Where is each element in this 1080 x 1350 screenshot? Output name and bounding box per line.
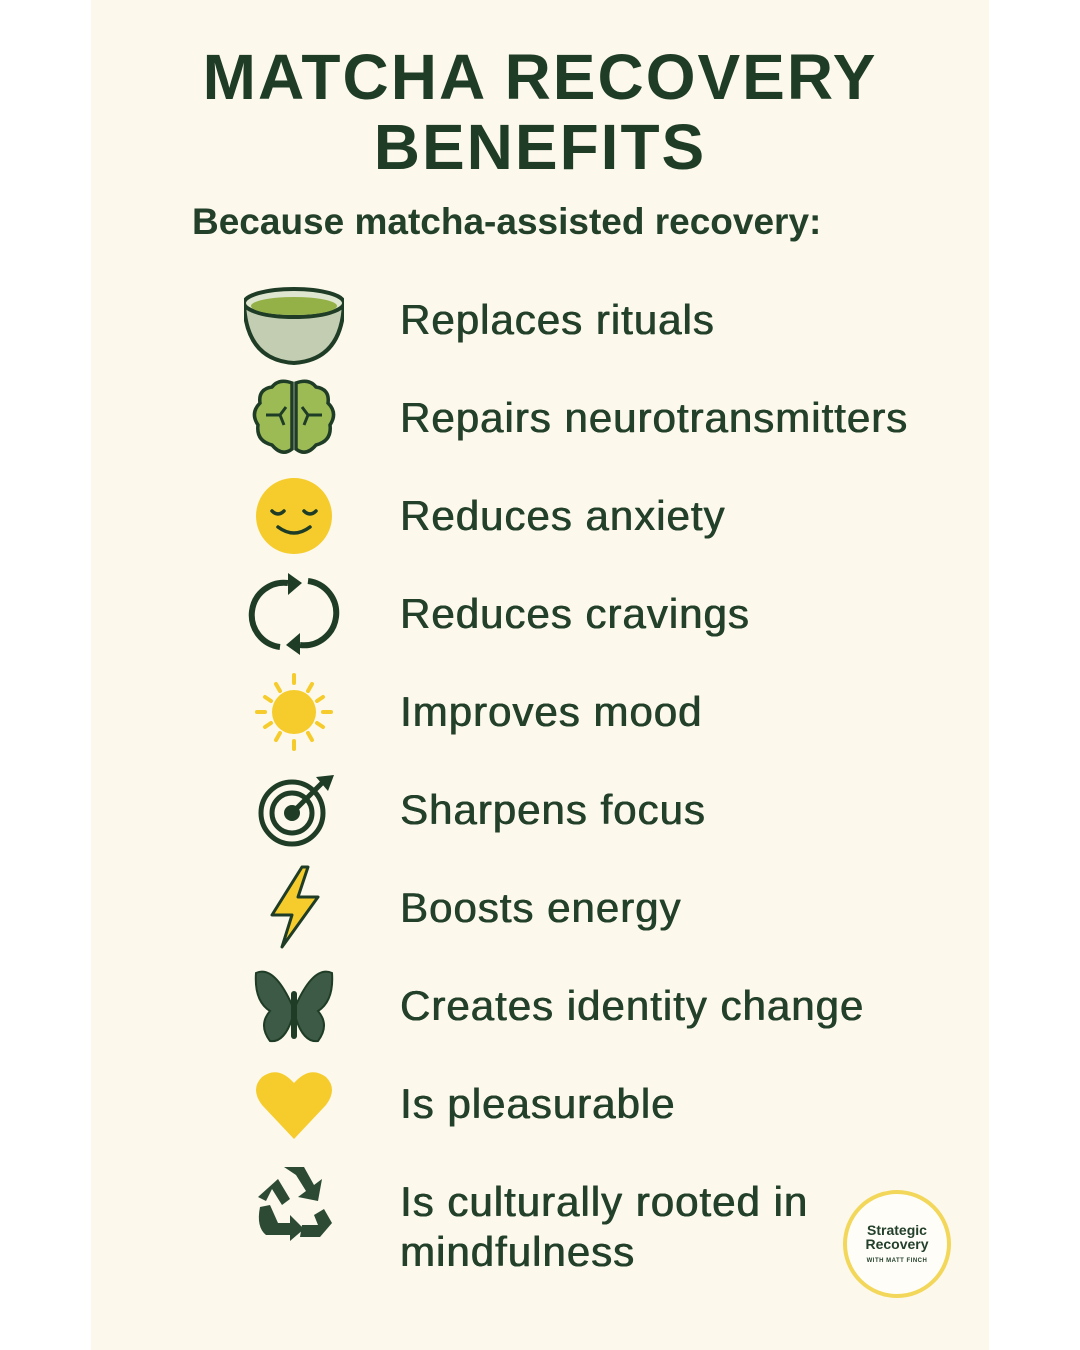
icon: butterfly	[254, 970, 334, 1042]
logo: strategic recovery: WITH MATT FINCH	[867, 1258, 927, 1264]
text: creates identity change: Creates identity change	[400, 982, 864, 1029]
icon: heart	[256, 1072, 332, 1139]
title: BENEFITS	[374, 111, 706, 183]
text: boosts energy: Boosts energy	[400, 884, 682, 931]
title: MATCHA RECOVERY	[203, 41, 877, 113]
logo: strategic recovery: Recovery	[865, 1236, 929, 1252]
text: reduces anxiety: Reduces anxiety	[400, 492, 726, 539]
text: is culturally rooted in mindfulness: mindfulness	[400, 1228, 635, 1275]
icon: calm face	[256, 478, 332, 554]
text: repairs neurotransmitters: Repairs neurotransmitters	[400, 394, 908, 441]
icon: recycle	[258, 1167, 332, 1241]
icon: sun	[255, 673, 333, 751]
text: sharpens focus: Sharpens focus	[400, 786, 706, 833]
subtitle: Because matcha-assisted recovery:	[192, 201, 821, 242]
icon: brain	[252, 380, 336, 454]
icon: cycle arrows	[248, 573, 340, 655]
logo: strategic recovery: Strategic	[867, 1222, 927, 1238]
icon: matcha bowl	[244, 287, 344, 365]
text: replaces rituals: Replaces rituals	[400, 296, 715, 343]
text: reduces cravings: Reduces cravings	[400, 590, 750, 637]
icon: lightning bolt	[270, 866, 320, 948]
logo: strategic recovery	[843, 1190, 951, 1298]
icon: target	[258, 775, 334, 846]
text: improves mood: Improves mood	[400, 688, 702, 735]
title	[203, 41, 877, 183]
text: is culturally rooted in mindfulness: Is culturally rooted in	[400, 1178, 808, 1225]
text: is pleasurable: Is pleasurable	[400, 1080, 676, 1127]
text: is culturally rooted in mindfulness	[400, 1178, 808, 1275]
